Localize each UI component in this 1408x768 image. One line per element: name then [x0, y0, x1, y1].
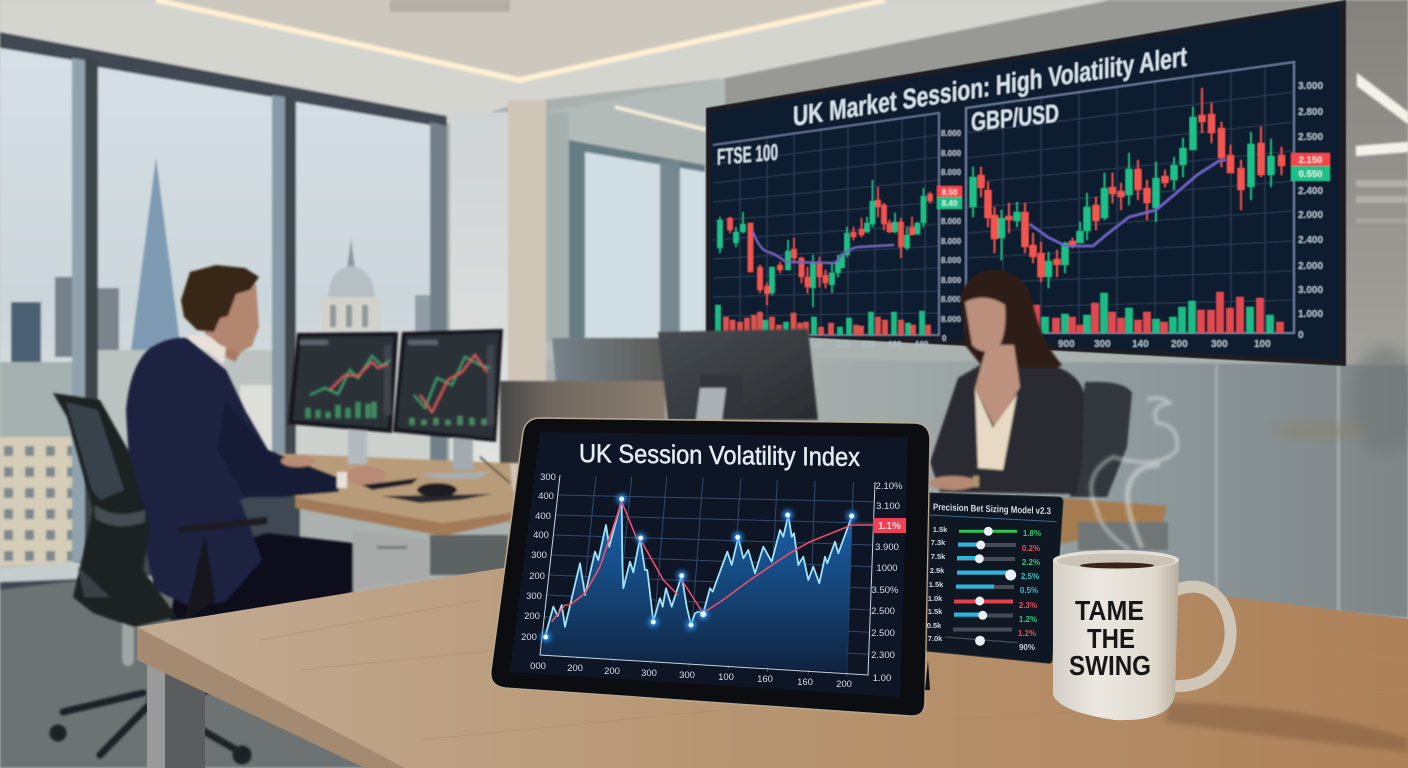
monitor right — [393, 329, 510, 483]
bottom axis labels: 200 — [836, 679, 852, 690]
slider right labels: 0.2% — [1022, 544, 1040, 553]
bottom axis labels: 000 — [530, 661, 546, 672]
value tag: 1.1% — [878, 521, 901, 532]
The Shard — [131, 157, 181, 350]
volatility chart — [521, 472, 906, 690]
tablet title: UK Session Volatility Index — [579, 438, 860, 472]
right axis labels: 2.10% — [876, 481, 903, 492]
trousers — [170, 533, 353, 620]
lower glass wall — [815, 345, 1408, 618]
GBP axis labels: 900 — [1058, 339, 1075, 350]
GBP axis labels: 2.000 — [1298, 261, 1323, 272]
office chair back — [53, 393, 267, 627]
tablet: UK Session Volatility Index — [491, 418, 930, 716]
GBP axis labels: 0 — [1298, 330, 1304, 341]
slider rows — [945, 527, 1018, 646]
left axis labels: 200 — [524, 611, 540, 622]
FTSE price tags — [937, 186, 962, 209]
mug rim — [1053, 550, 1179, 570]
right axis labels — [871, 481, 903, 684]
FTSE axis labels: 8.000 — [941, 276, 962, 285]
GBP axis labels: 100 — [1254, 339, 1271, 350]
jacket — [126, 338, 340, 605]
right axis labels: 3.900 — [875, 542, 899, 553]
mug: TAME THE SWING — [1053, 550, 1408, 752]
slider left labels: 2.9k — [930, 566, 945, 575]
slider left labels: 7.0k — [928, 634, 943, 643]
hands — [281, 455, 315, 467]
left axis labels: 300 — [540, 472, 556, 483]
label GBP/USD: GBP/USD — [971, 98, 1059, 137]
slider left labels: 1.5k — [928, 607, 943, 616]
hair — [960, 270, 1062, 385]
FTSE axis labels: 8.000 — [941, 129, 962, 138]
slider left labels: 1.5k — [933, 525, 948, 534]
FTSE axis labels: 100 — [915, 340, 929, 349]
window frame — [0, 32, 447, 592]
mug text: SWING — [1069, 650, 1151, 681]
slider left labels: 7.3k — [931, 538, 946, 547]
FTSE axis labels: 8.000 — [941, 237, 962, 246]
bottom axis labels: 160 — [757, 674, 773, 685]
slider right labels: 1.2% — [1018, 629, 1036, 638]
bottom axis labels: 100 — [718, 672, 734, 683]
FTSE axis labels: 8.000 — [941, 315, 962, 324]
coffee — [1080, 562, 1154, 568]
man's desk — [267, 453, 515, 536]
jacket — [930, 362, 1084, 494]
slider left labels: 7.5k — [931, 552, 946, 561]
GBP axis labels: 1.000 — [1298, 309, 1323, 320]
face — [965, 298, 1005, 352]
slider left labels: 1.5k — [929, 580, 944, 589]
right axis labels: 3.100 — [876, 501, 900, 512]
tablet body — [491, 418, 930, 716]
air vent — [390, 0, 510, 12]
slider right labels: 90% — [1019, 643, 1035, 652]
left axis labels: 300 — [526, 591, 542, 602]
window mullions — [0, 58, 447, 582]
mug handle — [1174, 587, 1231, 686]
peak dots — [543, 496, 854, 640]
bottom axis labels — [530, 661, 852, 690]
mug shadow — [1165, 702, 1408, 752]
monitor back — [658, 329, 818, 420]
collar — [186, 334, 226, 364]
FTSE axis labels: 100 — [810, 340, 824, 349]
FTSE axis labels: 100 — [888, 340, 902, 349]
FTSE axis labels: 100 — [836, 340, 850, 349]
neck — [205, 325, 245, 362]
foreground table — [137, 533, 1408, 768]
GBP price tags — [1291, 153, 1330, 181]
value tag — [873, 518, 906, 533]
panel body — [927, 493, 1063, 663]
slider right labels: 2.5% — [1021, 572, 1039, 581]
FTSE axis labels: 8.000 — [941, 256, 962, 265]
volatility line — [545, 500, 852, 637]
slider left labels: 1.0k — [928, 594, 943, 603]
left axis labels: 400 — [533, 530, 549, 541]
woman — [929, 270, 1084, 494]
FTSE volume bars — [718, 305, 928, 335]
GBP price tags: 2.150 — [1299, 155, 1322, 166]
right wall with light strips — [1345, 0, 1408, 370]
mug text — [1069, 595, 1151, 681]
woman's chair — [1070, 382, 1132, 497]
bottom axis labels: 300 — [641, 668, 657, 679]
head skin — [208, 284, 259, 353]
slider left labels — [927, 525, 948, 643]
slider right labels: 0.5% — [1020, 586, 1038, 595]
pillar — [450, 100, 546, 492]
GBP axis labels: 3.000 — [1298, 81, 1323, 92]
hand and watch — [929, 476, 979, 490]
chart: GBP/USD — [966, 62, 1330, 350]
FTSE moving average — [753, 232, 894, 263]
right axis labels: 1.00 — [873, 673, 891, 684]
slider left labels: 0.5k — [927, 621, 942, 630]
GBP axis labels: 2.400 — [1298, 235, 1323, 246]
hair — [181, 265, 259, 332]
FTSE axis labels: 8.000 — [941, 149, 962, 158]
drawer cabinet — [353, 530, 508, 590]
right axis labels: 1000 — [876, 563, 898, 574]
man in suit — [126, 265, 386, 620]
GBP axis labels — [1058, 81, 1323, 350]
rear monitor — [552, 338, 664, 382]
area under curve — [540, 500, 852, 672]
left axis labels: 400 — [535, 511, 551, 522]
FTSE axis labels: 100 — [862, 340, 876, 349]
slider right labels: 1.8% — [1023, 529, 1041, 538]
bottom axis labels: 300 — [679, 670, 695, 681]
right axis labels: 2.500 — [871, 628, 895, 639]
slider right labels: 2.3% — [1019, 601, 1037, 610]
blouse — [975, 388, 1017, 470]
keyboard and mouse — [362, 478, 493, 503]
GBP axis labels: 2.400 — [1298, 186, 1323, 197]
left axis labels: 400 — [538, 491, 554, 502]
GBP axis labels: 300 — [1211, 339, 1228, 350]
bottom axis labels: 160 — [797, 677, 813, 688]
mug text: TAME — [1075, 595, 1144, 626]
slider right labels — [1018, 529, 1041, 652]
screen surface — [711, 6, 1339, 360]
monitor left — [288, 332, 398, 464]
FTSE axis labels: 8.000 — [941, 295, 962, 304]
mug body — [1053, 560, 1179, 720]
FTSE axis labels: 8.000 — [941, 217, 962, 226]
panel: Precision Bet Sizing Model — [927, 493, 1063, 663]
FTSE candlesticks — [720, 180, 930, 307]
dome of St Paul's — [321, 238, 381, 333]
slider right labels: 2.2% — [1022, 558, 1040, 567]
screen title: UK Market Session: High Volatility Alert — [793, 41, 1187, 132]
GBP axis labels: 2.800 — [1298, 107, 1323, 118]
GBP axis labels: 2.500 — [1298, 132, 1323, 143]
FTSE axis labels: 8.000 — [941, 168, 962, 177]
back office scene — [53, 265, 1168, 761]
upper back wall — [708, 0, 1345, 108]
glass room — [546, 78, 725, 360]
panel: large wall screen — [706, 0, 1346, 366]
FTSE axis labels: 0 — [942, 334, 947, 343]
panel title: Precision Bet Sizing Model v2.3 — [933, 502, 1051, 517]
bottom axis labels: 200 — [604, 666, 620, 677]
left axis labels — [521, 472, 556, 643]
GBP candlesticks — [973, 88, 1282, 288]
tablet screen — [510, 432, 908, 697]
windows with London skyline — [0, 40, 440, 580]
floor — [0, 578, 400, 768]
label FTSE 100: FTSE 100 — [717, 139, 778, 170]
left axis labels: 300 — [531, 550, 547, 561]
GBP price tags: 0.550 — [1299, 169, 1322, 180]
slider knobs — [975, 527, 1016, 646]
GBP axis labels: 140 — [1132, 339, 1149, 350]
GBP moving average — [1030, 160, 1226, 246]
GBP axis labels: 3.000 — [1298, 285, 1323, 296]
right axis labels: 2.500 — [871, 606, 895, 617]
mug text: THE — [1087, 623, 1135, 654]
steam from mug — [1091, 398, 1177, 550]
table leg — [147, 660, 205, 768]
bottom axis labels: 200 — [567, 663, 583, 674]
frame axes — [540, 475, 875, 675]
GBP volume bars — [1036, 292, 1280, 333]
partition — [500, 381, 665, 463]
GBP axis labels: 200 — [1171, 339, 1188, 350]
red trend line — [552, 502, 873, 622]
ceiling — [0, 0, 1110, 124]
GBP axis labels: 2.000 — [1298, 210, 1323, 221]
tablet stand edge — [925, 660, 930, 690]
GBP axis labels: 300 — [1094, 339, 1111, 350]
left axis labels: 200 — [529, 571, 545, 582]
right axis labels: 2.300 — [871, 650, 895, 661]
FTSE price tags: 8.40 — [942, 199, 958, 208]
woman's desk — [1045, 497, 1168, 550]
peak dots glow — [541, 494, 857, 642]
sleeve shadow — [218, 400, 338, 497]
ceiling tray — [156, 0, 885, 80]
right axis labels: 3.50% — [872, 585, 899, 596]
slider right labels: 1.2% — [1019, 615, 1037, 624]
FTSE price tags: 8.50 — [942, 188, 958, 197]
left axis labels: 200 — [521, 632, 537, 643]
table edge — [137, 627, 420, 768]
neck and chest — [975, 345, 1020, 428]
office chair base — [53, 610, 248, 761]
chart: FTSE 100 — [713, 113, 962, 349]
ceiling light strip — [156, 0, 885, 80]
table top — [137, 533, 1408, 768]
FTSE axis labels — [810, 129, 962, 349]
